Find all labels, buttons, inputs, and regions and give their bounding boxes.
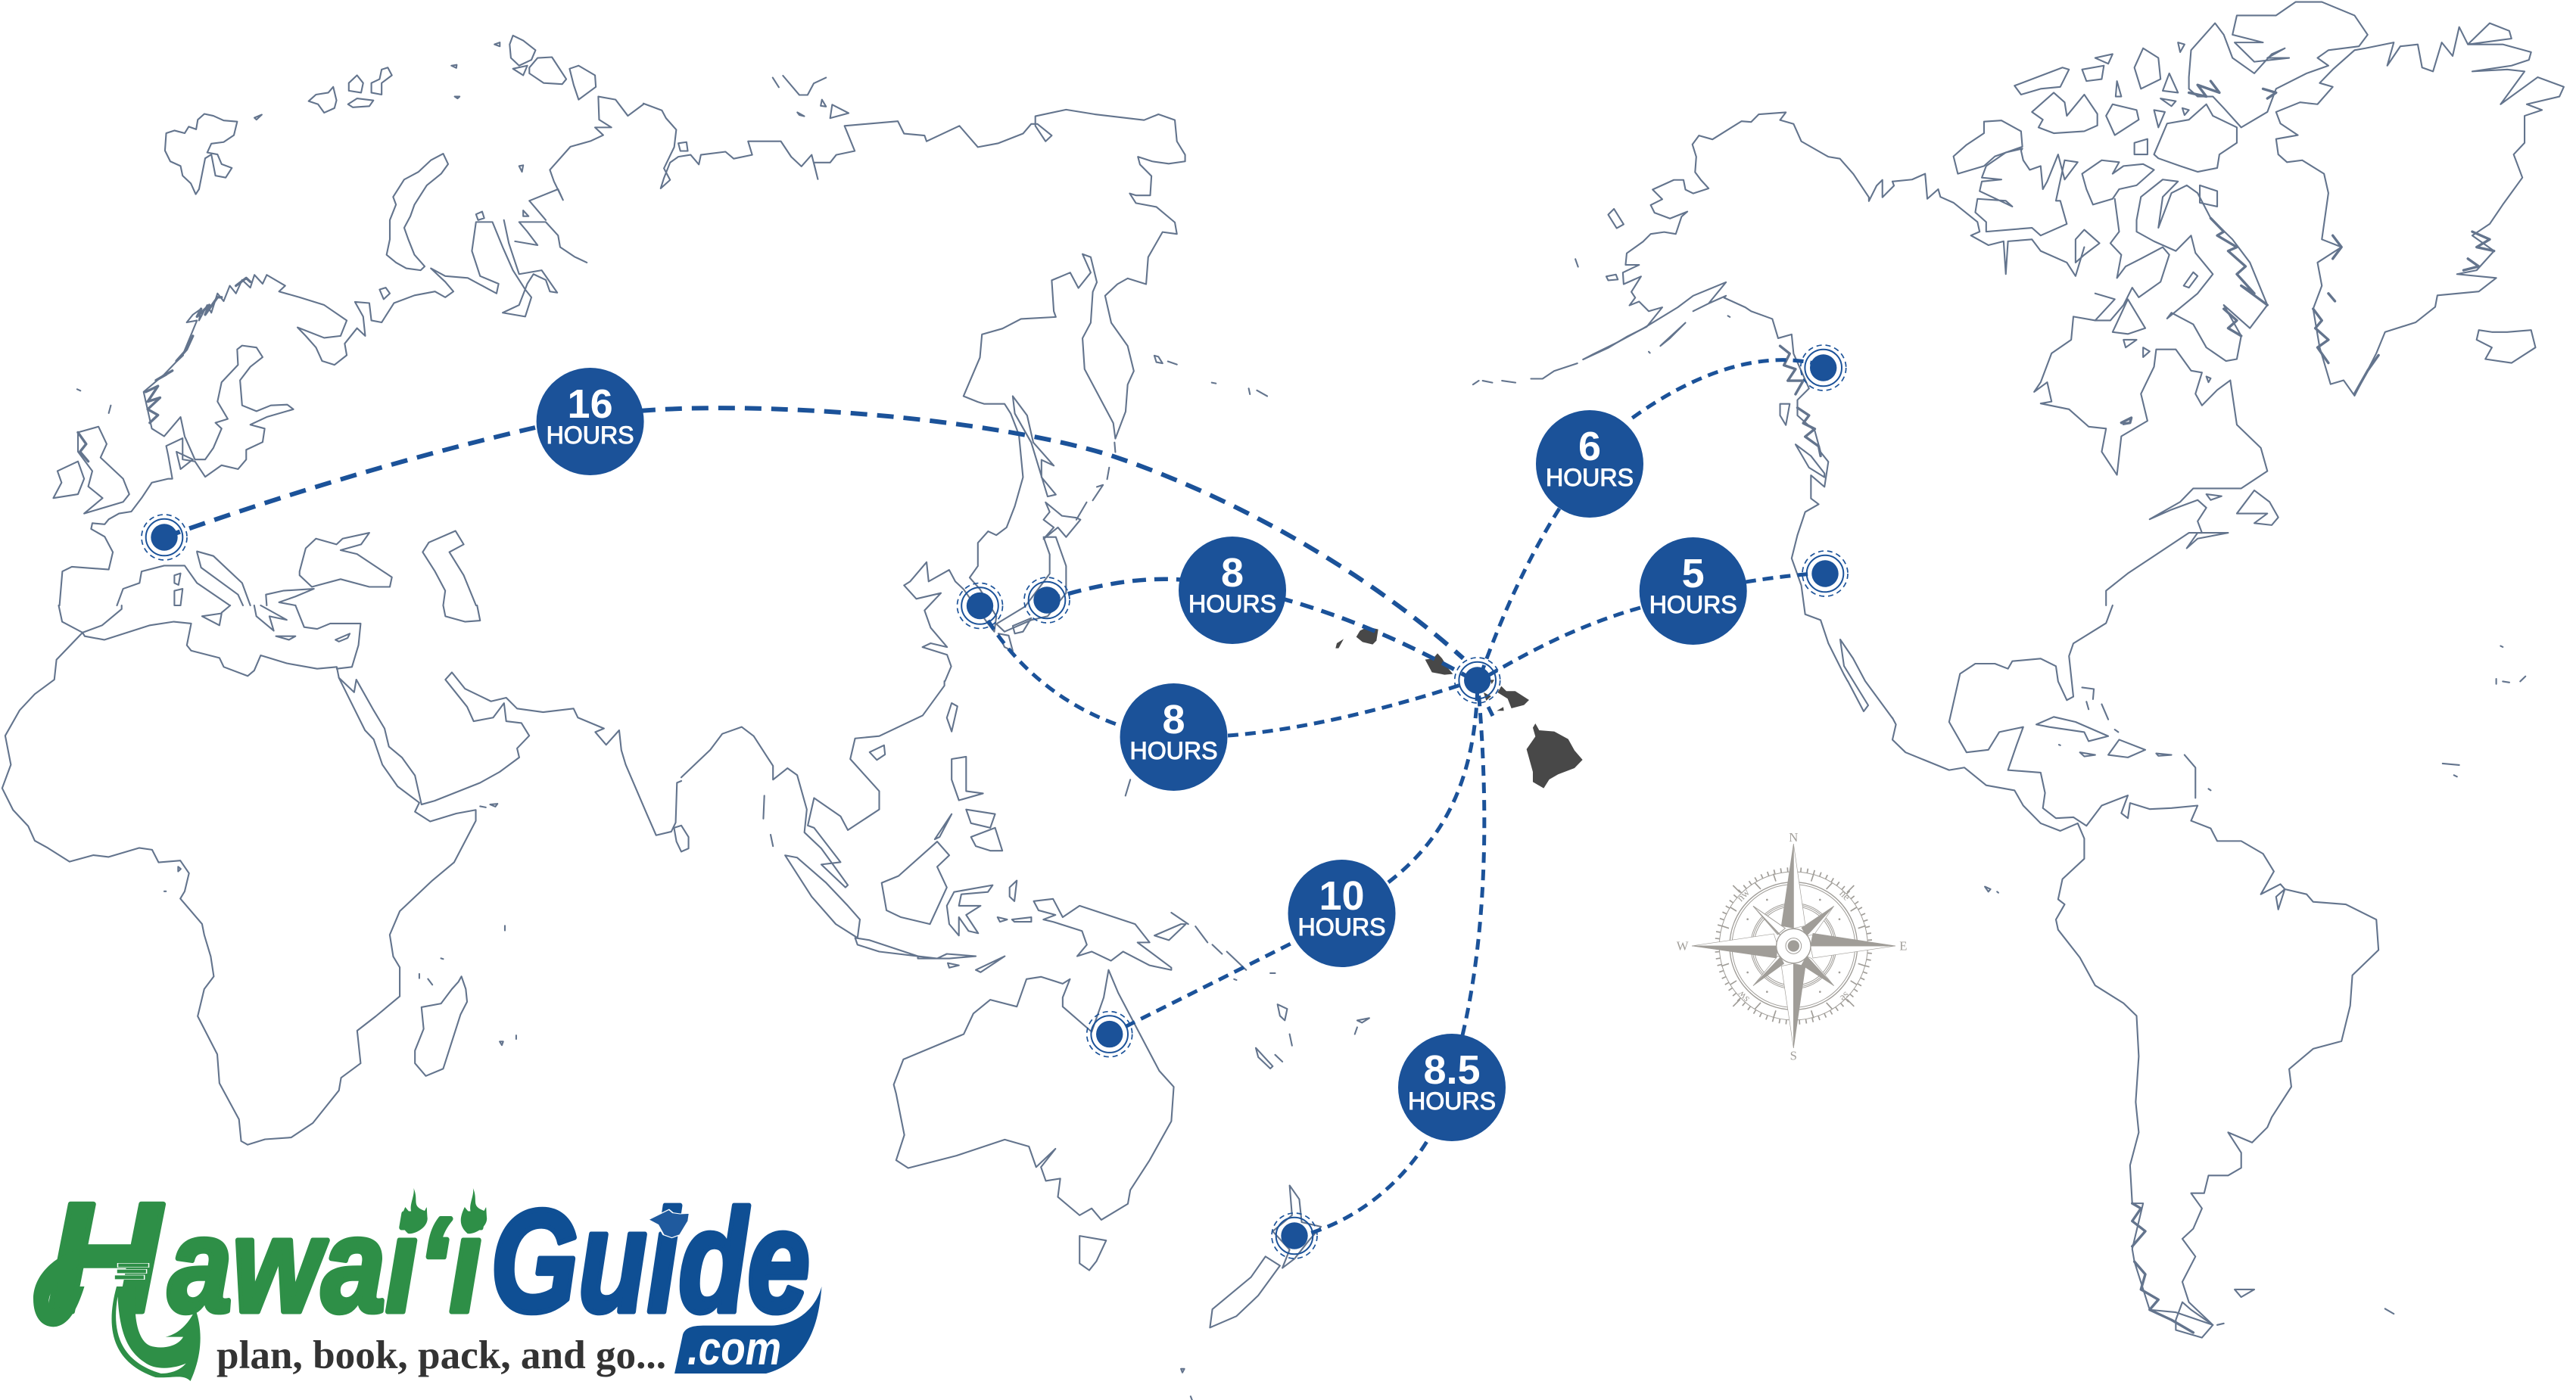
marker: Tokyo xyxy=(1024,577,1070,623)
island: Lanai xyxy=(1484,692,1491,701)
badge: 10 hours: 10 xyxy=(1319,873,1365,919)
marker: Vancouver xyxy=(1801,345,1846,390)
badge: 8 hours, Seoul: HOURS xyxy=(1129,737,1217,764)
logo: .com: .com xyxy=(687,1323,781,1375)
badge: 5 hours: HOURS xyxy=(1649,591,1737,618)
compass: direction letters: sw xyxy=(1735,988,1752,1004)
badge: 5 hours: 5 xyxy=(1682,551,1705,596)
marker: Auckland xyxy=(1272,1213,1317,1258)
logo: shaka hand xyxy=(649,1209,690,1238)
marker: Europe xyxy=(142,515,187,560)
logo: Hawaii wordmark: awai‘i xyxy=(168,1190,484,1340)
badge: 8 hours, Tokyo: 8 xyxy=(1221,550,1244,596)
map: Arctic Canada, eastern North America, Greenland, Iceland xyxy=(1892,2,2564,605)
route: Europe to Hawaii, 16 hours xyxy=(164,408,1463,658)
route: Cairns to Hawaii, 10 hours xyxy=(1110,681,1478,1034)
badge: 8.5 hours xyxy=(1398,1034,1506,1141)
marker: Hawaii hub xyxy=(1455,658,1500,703)
badge: 16 hours: 16 xyxy=(568,381,613,427)
route: Vancouver to Hawaii, 6 hours xyxy=(1480,360,1821,677)
route: Seoul to Hawaii, 8 hours xyxy=(980,605,1472,736)
badge: 8 hours, Seoul xyxy=(1120,683,1228,791)
route: Los Angeles to Hawaii, 5 hours xyxy=(1480,573,1825,680)
badge: 5 hours xyxy=(1640,537,1747,645)
badge: 16 hours xyxy=(537,368,644,475)
badge: 8.5 hours: 8.5 xyxy=(1423,1047,1481,1093)
logo: H swash and fish hook xyxy=(33,1249,201,1381)
map: eastern Siberia, China, Korea, Japan xyxy=(643,76,1267,681)
badge: 6 hours xyxy=(1536,410,1643,518)
island: Niihau xyxy=(1335,639,1344,649)
island: Kahoolawe xyxy=(1497,707,1504,711)
compass: secondary points xyxy=(1753,906,1834,986)
compass: dots xyxy=(1746,899,1840,993)
map: Africa, Arabia and India xyxy=(2,605,681,1145)
compass: direction letters: S xyxy=(1790,1049,1797,1063)
logo: Hawaii Guide xyxy=(33,1171,821,1381)
island: Hawaii xyxy=(1527,723,1583,789)
badge: 6 hours: 6 xyxy=(1578,424,1601,469)
logo: tagline: plan, book, pack, and go... xyxy=(216,1333,666,1377)
badge: 16 hours: HOURS xyxy=(547,422,634,449)
compass: direction letters: nw xyxy=(1735,887,1752,904)
marker: Seoul xyxy=(957,583,1002,628)
compass: direction letters: ne xyxy=(1836,888,1852,903)
logo: .com banner xyxy=(674,1286,821,1374)
marker: Cairns xyxy=(1087,1012,1132,1057)
badge: 10 hours xyxy=(1288,860,1396,967)
logo: flames xyxy=(401,1188,487,1234)
compass: centre hub xyxy=(1777,929,1811,963)
island: Oahu xyxy=(1425,653,1453,675)
map: Baja California link xyxy=(1840,639,1892,718)
compass: direction letters: se xyxy=(1837,989,1852,1003)
route: Tokyo to Hawaii, 8 hours xyxy=(1047,579,1469,677)
logo: Guide wordmark: Guide xyxy=(491,1179,810,1342)
compass: cardinal points xyxy=(1692,844,1895,1048)
compass: direction letters: N xyxy=(1789,830,1798,845)
compass: direction letters: W xyxy=(1677,939,1689,954)
island: Molokai xyxy=(1490,680,1494,684)
marker: Los Angeles xyxy=(1802,551,1848,596)
island: Kauai xyxy=(1357,627,1378,645)
badge: 8 hours, Seoul: 8 xyxy=(1162,697,1185,742)
logo: Hawaii wordmark: H xyxy=(47,1171,164,1345)
Hawaiian islands xyxy=(1335,627,1583,789)
badge: 10 hours: HOURS xyxy=(1297,913,1385,941)
map: Central and South America xyxy=(1892,605,2525,1338)
map: Europe and western Russia xyxy=(53,36,643,605)
map: Alaska and the Pacific coast xyxy=(1473,112,1894,681)
compass rose xyxy=(1677,830,1907,1063)
map: South East Asia, Australia, New Zealand xyxy=(674,681,1369,1400)
badge: 8.5 hours: HOURS xyxy=(1408,1087,1496,1115)
logo: Hawaii wordmark xyxy=(47,1171,484,1345)
island: Maui xyxy=(1497,686,1529,708)
badge: 8 hours, Tokyo: HOURS xyxy=(1188,590,1276,618)
compass: direction letters xyxy=(1677,830,1907,1063)
compass: direction letters: E xyxy=(1899,939,1907,954)
route: Auckland to Hawaii, 8.5 hours xyxy=(1294,681,1493,1237)
badge: 6 hours: HOURS xyxy=(1546,464,1634,491)
badge: 8 hours, Tokyo xyxy=(1179,537,1286,644)
